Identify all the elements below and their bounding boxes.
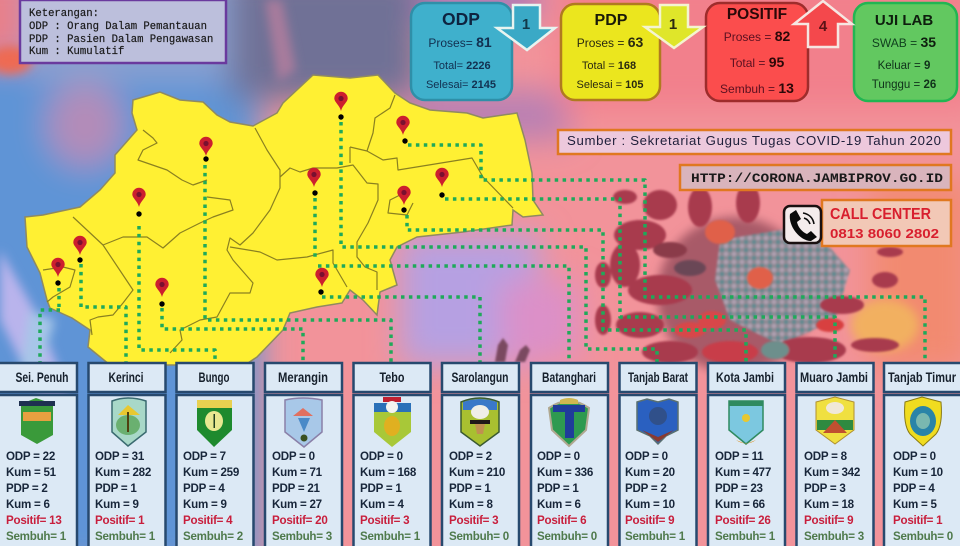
card: Muaro Jambi: Muaro Jambi bbox=[800, 369, 868, 385]
card: Tanjab Timur bbox=[884, 363, 960, 546]
card: Tanjab Barat: ODP = 0 bbox=[625, 450, 668, 463]
emblem: Tanjab Timur bbox=[905, 397, 941, 446]
card: Batanghari bbox=[531, 363, 608, 546]
website address bbox=[680, 165, 951, 190]
card: Bungo: Bungo bbox=[198, 369, 230, 385]
emblem: Kerinci bbox=[112, 398, 146, 446]
card: Tanjab Barat: PDP = 2 bbox=[625, 482, 667, 495]
map pins with location dots bbox=[51, 92, 449, 307]
card: Kerinci: ODP = 31 bbox=[95, 450, 145, 463]
call center: 0813 8060 2802 bbox=[830, 226, 939, 241]
card: Merangin: Sembuh= 3 bbox=[272, 530, 333, 543]
card: Kota Jambi: ODP = 11 bbox=[715, 450, 764, 463]
card: Batanghari: ODP = 0 bbox=[537, 450, 580, 463]
card: Tebo: Positif= 3 bbox=[360, 514, 410, 527]
card: Batanghari: PDP = 1 bbox=[537, 482, 579, 495]
source note bbox=[558, 130, 951, 154]
card: Kota Jambi bbox=[708, 363, 785, 546]
legend box: PDP : Pasien Dalam Pengawasan bbox=[29, 34, 213, 46]
arrow: POSITIF up 4: 4 bbox=[819, 18, 828, 35]
small virus spikes near bottom bbox=[495, 338, 530, 362]
card: Batanghari: Sembuh= 0 bbox=[537, 530, 597, 543]
card: Kerinci: Positif= 1 bbox=[95, 514, 145, 527]
card: Tebo: Kum = 168 bbox=[360, 466, 417, 479]
panel: UJI LAB: Tunggu = 26 bbox=[872, 79, 936, 91]
panel: PDP: PDP bbox=[595, 12, 628, 29]
source note: Sumber : Sekretariat Gugus Tugas COVID-19 Tahun 2020 bbox=[567, 133, 941, 148]
panel: UJI LAB: UJI LAB bbox=[875, 12, 933, 29]
card: Bungo: Sembuh= 2 bbox=[183, 530, 243, 543]
card: Bungo bbox=[176, 363, 254, 546]
card: Sei. Penuh: ODP = 22 bbox=[6, 450, 55, 463]
card: Sarolangun: Positif= 3 bbox=[449, 514, 499, 527]
panel: UJI LAB: SWAB = 35 bbox=[872, 34, 936, 50]
card: Muaro Jambi: ODP = 8 bbox=[804, 450, 848, 463]
card: Sei. Penuh: Positif= 13 bbox=[6, 514, 62, 527]
panel: ODP: Selesai= 2145 bbox=[426, 79, 496, 91]
card: Tanjab Barat: Kum = 10 bbox=[625, 498, 675, 511]
card: Kota Jambi: Kum = 477 bbox=[715, 466, 771, 479]
panel: ODP: Total= 2226 bbox=[433, 60, 491, 72]
arrow: PDP down 1: 1 bbox=[669, 16, 677, 33]
card: Tanjab Timur: PDP = 4 bbox=[893, 482, 935, 495]
virus illustration bbox=[595, 183, 903, 373]
card: Tanjab Barat: Positif= 9 bbox=[625, 514, 675, 527]
panel: ODP: Proses= 81 bbox=[428, 34, 492, 50]
panel: UJI LAB: Keluar = 9 bbox=[878, 60, 930, 72]
card: Sei. Penuh: Kum = 51 bbox=[6, 466, 57, 479]
card: Merangin: ODP = 0 bbox=[272, 450, 315, 463]
card: Sarolangun: Kum = 210 bbox=[449, 466, 505, 479]
card: Tanjab Barat bbox=[620, 363, 696, 546]
emblem: Batanghari bbox=[549, 398, 589, 446]
card: Kerinci bbox=[88, 363, 166, 546]
card: Kerinci: Kerinci bbox=[108, 369, 144, 385]
map of Jambi province bbox=[25, 75, 543, 365]
card: Bungo: Positif= 4 bbox=[183, 514, 233, 527]
panel: POSITIF bbox=[706, 3, 808, 101]
card: Bungo: Kum = 259 bbox=[183, 466, 240, 479]
panel: UJI LAB bbox=[854, 3, 957, 101]
legend box bbox=[20, 0, 226, 63]
card: Tanjab Timur: Positif= 1 bbox=[893, 514, 943, 527]
card: Sarolangun: Sarolangun bbox=[452, 369, 508, 385]
card: Sarolangun: Sembuh= 0 bbox=[449, 530, 509, 543]
card: Sarolangun: PDP = 1 bbox=[449, 482, 491, 495]
card: Merangin: Kum = 71 bbox=[272, 466, 323, 479]
card: Batanghari: Kum = 6 bbox=[537, 498, 581, 511]
emblem: Kota Jambi bbox=[729, 401, 763, 444]
legend box: Keterangan: bbox=[29, 8, 99, 20]
card: Tanjab Timur: Kum = 5 bbox=[893, 498, 937, 511]
card: Batanghari: Kum = 336 bbox=[537, 466, 594, 479]
card: Muaro Jambi: PDP = 3 bbox=[804, 482, 846, 495]
card: Muaro Jambi: Kum = 18 bbox=[804, 498, 855, 511]
card: Muaro Jambi: Kum = 342 bbox=[804, 466, 860, 479]
card: Merangin: Kum = 27 bbox=[272, 498, 322, 511]
panel: POSITIF: Proses = 82 bbox=[724, 28, 791, 44]
card: Tanjab Timur: Sembuh= 0 bbox=[893, 530, 953, 543]
card: Muaro Jambi bbox=[796, 363, 874, 546]
card: Merangin: Merangin bbox=[278, 369, 328, 385]
card: Sei. Penuh: Sembuh= 1 bbox=[6, 530, 67, 543]
legend box: ODP : Orang Dalam Pemantauan bbox=[29, 21, 207, 33]
panel: PDP: Proses = 63 bbox=[577, 34, 644, 50]
card: Sarolangun: ODP = 2 bbox=[449, 450, 492, 463]
card: Merangin: Positif= 20 bbox=[272, 514, 328, 527]
card: Kota Jambi: Positif= 26 bbox=[715, 514, 771, 527]
card: Tanjab Barat: Sembuh= 1 bbox=[625, 530, 686, 543]
card: Tebo bbox=[354, 363, 430, 546]
arrow: ODP down 1 bbox=[497, 5, 555, 50]
emblem: Bungo bbox=[197, 400, 232, 447]
card: Kota Jambi: Kum = 66 bbox=[715, 498, 766, 511]
card: Merangin: PDP = 21 bbox=[272, 482, 321, 495]
panel: ODP: ODP bbox=[442, 9, 480, 29]
card: Bungo: Kum = 9 bbox=[183, 498, 227, 511]
emblem: Sarolangun bbox=[461, 398, 499, 446]
card: Merangin bbox=[265, 363, 342, 546]
panel: POSITIF: Sembuh = 13 bbox=[720, 80, 794, 96]
card: Kerinci: Kum = 9 bbox=[95, 498, 139, 511]
card: Tebo: ODP = 0 bbox=[360, 450, 403, 463]
panel: POSITIF: Total = 95 bbox=[730, 54, 785, 70]
call center bbox=[784, 200, 951, 246]
card: Tebo: Sembuh= 1 bbox=[360, 530, 421, 543]
website address: HTTP://CORONA.JAMBIPROV.GO.ID bbox=[691, 171, 943, 186]
dotted connector lines from regions to cards bbox=[40, 122, 925, 362]
arrow: POSITIF up 4 bbox=[794, 1, 852, 47]
panel: PDP: Selesai = 105 bbox=[577, 79, 643, 91]
card: Kerinci: Kum = 282 bbox=[95, 466, 151, 479]
card: Kerinci: PDP = 1 bbox=[95, 482, 137, 495]
card: Kota Jambi: Sembuh= 1 bbox=[715, 530, 776, 543]
card: Bungo: PDP = 4 bbox=[183, 482, 225, 495]
card: Kota Jambi: PDP = 23 bbox=[715, 482, 764, 495]
panel: PDP: Total = 168 bbox=[582, 60, 636, 72]
card: Tanjab Barat: Kum = 20 bbox=[625, 466, 675, 479]
card: Sei. Penuh bbox=[0, 363, 77, 546]
panel: POSITIF: POSITIF bbox=[727, 6, 787, 23]
card: Batanghari: Batanghari bbox=[542, 369, 596, 385]
emblem: Muaro Jambi bbox=[816, 397, 854, 444]
panel: ODP bbox=[411, 3, 512, 100]
card: Kerinci: Sembuh= 1 bbox=[95, 530, 156, 543]
card: Sarolangun: Kum = 8 bbox=[449, 498, 493, 511]
card: Muaro Jambi: Positif= 9 bbox=[804, 514, 854, 527]
arrow: ODP down 1: 1 bbox=[522, 16, 530, 33]
emblem: Tanjab Barat bbox=[637, 399, 678, 444]
card: Tebo: Kum = 4 bbox=[360, 498, 404, 511]
card: Tanjab Timur: ODP = 0 bbox=[893, 450, 936, 463]
card: Tanjab Timur: Kum = 10 bbox=[893, 466, 943, 479]
legend box: Kum : Kumulatif bbox=[29, 46, 124, 58]
arrow: PDP down 1 bbox=[645, 5, 703, 48]
card: Sei. Penuh: Sei. Penuh bbox=[16, 369, 68, 385]
card: Kota Jambi: Kota Jambi bbox=[716, 369, 774, 385]
call center: CALL CENTER bbox=[830, 206, 931, 223]
card: Sei. Penuh: PDP = 2 bbox=[6, 482, 48, 495]
icon: telephone bbox=[784, 206, 821, 243]
card: Sei. Penuh: Kum = 6 bbox=[6, 498, 50, 511]
card: Bungo: ODP = 7 bbox=[183, 450, 226, 463]
card: Muaro Jambi: Sembuh= 3 bbox=[804, 530, 865, 543]
card: Tanjab Barat: Tanjab Barat bbox=[628, 369, 688, 385]
card: Tebo: Tebo bbox=[380, 369, 404, 385]
panel: PDP bbox=[561, 4, 660, 100]
emblem: Sei. Penuh bbox=[19, 398, 55, 444]
emblem: Merangin bbox=[285, 398, 322, 447]
card: Tebo: PDP = 1 bbox=[360, 482, 402, 495]
emblem: Tebo bbox=[374, 397, 411, 447]
card: Batanghari: Positif= 6 bbox=[537, 514, 587, 527]
card: Sarolangun bbox=[442, 363, 519, 546]
